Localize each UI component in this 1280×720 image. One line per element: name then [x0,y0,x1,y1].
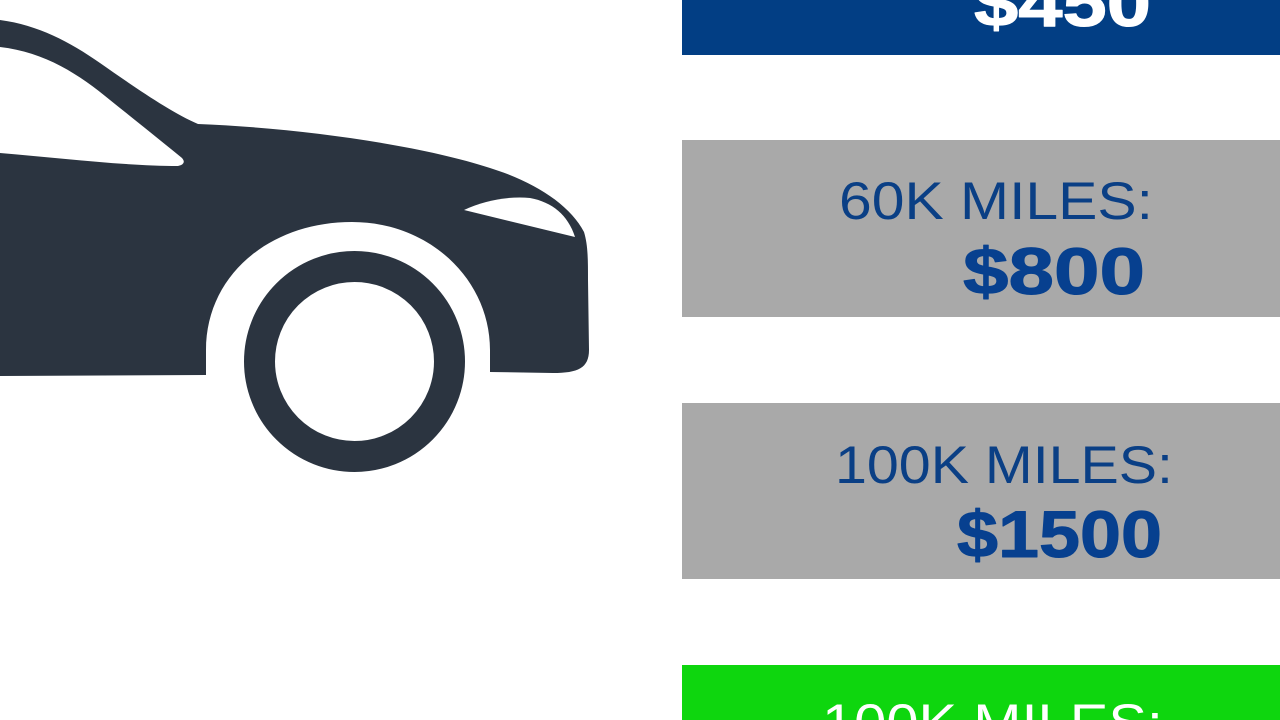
car window [0,47,184,166]
car headlight [464,198,575,237]
panel: top blue cost bar [682,0,1280,55]
icon: car silhouette, front section [0,20,589,456]
panel: 60K miles cost bar [682,140,1280,317]
price: $800: $800 [963,234,1145,308]
panel: 100K miles cost bar [682,403,1280,579]
car wheel [260,266,450,456]
panel: bottom green cost bar [682,665,1280,720]
label: 60K miles: 60K MILES: [839,172,1153,231]
car body [0,20,589,376]
price: $1500: $1500 [957,497,1162,571]
label: 100K miles: 100K MILES: [835,436,1173,495]
